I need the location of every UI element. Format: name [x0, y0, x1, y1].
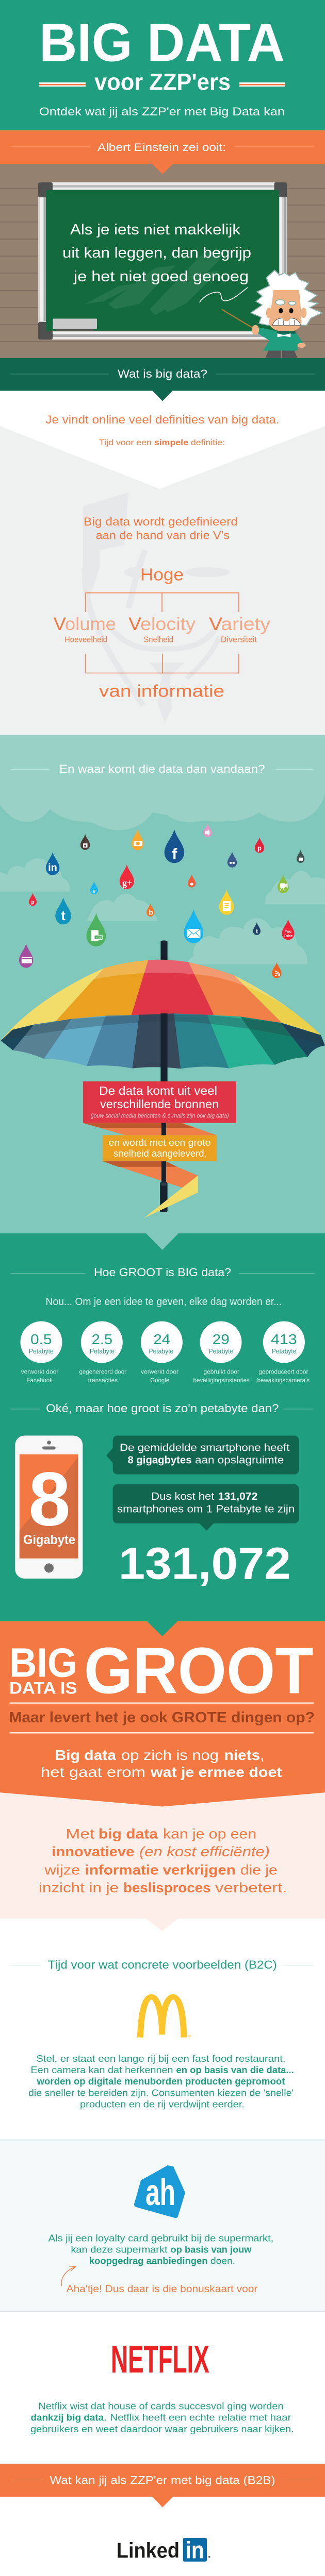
explanation: Met [66, 1826, 95, 1841]
text: die sneller te bereiden zijn. Consumenten kiezen de 'snelle' [28, 2088, 294, 2098]
red banner: (jouw social media berichten & e-mails zijn ook big data) [91, 1113, 229, 1119]
text [30, 2401, 294, 2434]
panel: big data is groot [0, 1621, 325, 1919]
panel: wat is big data [0, 358, 325, 735]
explanation: kan je op een [163, 1826, 256, 1841]
Variety: Diversiteit [221, 636, 257, 644]
band: section heading [0, 358, 325, 401]
ribbon and banners [83, 1081, 236, 1218]
eraser [53, 318, 97, 331]
text: worden op digitale menuborden producten gepromoot [36, 2076, 285, 2087]
text: producten en de rij verdwijnt eerder. [80, 2099, 245, 2109]
stat: 0.5 Petabyte Facebook: Facebook [26, 1377, 53, 1384]
Volume [54, 614, 116, 644]
section heading: Tijd voor wat concrete voorbeelden (B2C) [48, 1958, 277, 1971]
red banner [83, 1081, 236, 1123]
stat: 0.5 Petabyte Facebook: verwerkt door [21, 1368, 58, 1376]
explanation: (en kost efficiënte) [139, 1844, 270, 1859]
logo: LinkedIn: in [186, 2536, 204, 2563]
illustration: Einstein [222, 270, 322, 358]
drop icon letters: You [285, 930, 291, 934]
speech bubble: 131,072 smartphones: Dus kost het [151, 1491, 215, 1502]
drop icon letters: g+ [122, 878, 132, 888]
umbrella [1, 940, 325, 1083]
statement: Big data [55, 1747, 116, 1763]
arrow [61, 2266, 76, 2286]
explanation: beslisproces [123, 1880, 211, 1895]
chalkboard [38, 182, 287, 340]
speech bubble: 131,072 smartphones: 131,072 [218, 1491, 257, 1502]
heading: big data is groot: GROOT [84, 1634, 313, 1707]
intro text: Je vindt online veel definities van big data. [45, 413, 280, 426]
amber banner: snelheid aangeleverd. [113, 1148, 207, 1159]
clouds [0, 858, 325, 964]
red banner: verschillende bronnen [100, 1097, 219, 1111]
stat: 2.5 Petabyte transacties: gegenereerd door [79, 1368, 126, 1376]
text: Als jij een loyalty card gebruikt bij de supermarkt, [48, 2233, 273, 2243]
squiggle underline [199, 287, 248, 302]
drop icon letters: t [61, 908, 66, 923]
speech bubble: 8 gigabytes: aan opslagruimte [195, 1454, 284, 1466]
statement: het gaat erom [41, 1764, 145, 1780]
text: kan deze supermarkt [71, 2244, 168, 2255]
statement [41, 1747, 282, 1780]
illustration: smartphone 8 Gigabyte: Gigabyte [23, 1533, 75, 1547]
section heading: Hoe GROOT is BIG data? [94, 1266, 231, 1279]
chalk smudges [85, 249, 227, 315]
stat: 2.5 Petabyte transacties: 2.5 [92, 1331, 112, 1347]
text: Een camera kan dat herkennen [31, 2065, 173, 2075]
statement: niets [224, 1747, 260, 1763]
band: section heading: Wat is big data? [118, 367, 207, 380]
drop icon letters: f [172, 846, 177, 863]
text [48, 2233, 273, 2266]
Variety [209, 614, 271, 644]
stat: 24 Petabyte Google: verwerkt door [141, 1368, 178, 1376]
quote: uit kan leggen, dan begrijp [62, 245, 251, 261]
text: en op basis van die data... [176, 2065, 294, 2075]
statement: wat je ermee doet [150, 1764, 282, 1780]
band: Albert Einstein heading: Albert Einstein zei ooit: [98, 142, 226, 154]
explanation: informatie verkrijgen [85, 1862, 236, 1877]
quote: Als je iets niet makkelijk [70, 222, 241, 238]
text: gebruikers en weet daardoor waar gebruikers naar kijken. [30, 2424, 294, 2434]
definition heading: Big data wordt gedefinieerd [84, 515, 238, 528]
Variety: Variety [209, 614, 271, 634]
band: section heading [0, 2464, 325, 2507]
example: McDonald's [28, 1997, 294, 2109]
intro line: Ontdek wat jij als ZZP'er met Big Data kan [39, 105, 285, 118]
explanation: verbetert. [215, 1880, 287, 1895]
explanation [39, 1826, 287, 1895]
stat: 2.5 Petabyte transacties: Petabyte [90, 1347, 115, 1355]
logo: LinkedIn: Linked [117, 2538, 180, 2562]
top bracket [86, 593, 239, 612]
illustration: smartphone 8 Gigabyte: 8 [28, 1457, 71, 1541]
panel: Einstein quote with chalkboard [0, 130, 325, 358]
drop icon letters [31, 844, 293, 938]
section heading: En waar komt die data dan vandaan? [59, 762, 265, 775]
text: Netflix wist dat house of cards succesvol ging worden [38, 2401, 284, 2411]
statement: , [260, 1747, 264, 1763]
stat: 29 Petabyte beveiligingsinstanties: Petabyte [209, 1347, 233, 1355]
panel: B2B voorbeelden [0, 2464, 325, 2576]
text: Stel, er staat een lange rij bij een fast food restaurant. [36, 2054, 286, 2064]
statement: op zich is nog [121, 1747, 219, 1763]
logo: McDonald's arches [140, 1997, 191, 2038]
drop icon letters: v [93, 888, 96, 894]
drop icon letters: in [48, 862, 57, 874]
stat: 29 Petabyte beveiligingsinstanties: beveiligingsinstanties [193, 1377, 250, 1384]
speech bubble: 131,072 smartphones [113, 1484, 299, 1531]
text [28, 2054, 294, 2109]
band: Albert Einstein heading [0, 130, 325, 174]
stat: 29 Petabyte beveiligingsinstanties: gebruikt door [203, 1368, 239, 1376]
stat: 29 Petabyte beveiligingsinstanties: 29 [213, 1331, 230, 1347]
intro text [45, 413, 280, 447]
speech bubble: 8 gigabytes: 8 gigagbytes [128, 1454, 192, 1466]
heading: big data is groot: BIG [9, 1639, 77, 1685]
explanation: wijze [44, 1862, 80, 1877]
panel: B2C voorbeelden [0, 1919, 325, 2464]
stat: 413 Petabyte bewakingscamera's [257, 1321, 310, 1384]
stat: 29 Petabyte beveiligingsinstanties [193, 1321, 250, 1384]
Volume: Volume [54, 614, 116, 634]
subtitle: voor ZZP'ers [94, 69, 231, 95]
drop icon letters: Tube [284, 934, 293, 938]
speech bubble: 8 gigabytes [106, 1435, 299, 1475]
stat: 2.5 Petabyte transacties [79, 1321, 126, 1384]
cloud banner [0, 735, 325, 831]
stat: 24 Petabyte Google: 24 [153, 1331, 170, 1347]
intro sentence: Nou... Om je een idee te geven, elke dag worden er... [45, 1296, 282, 1308]
logo: AH: ah [145, 2172, 175, 2213]
example: Netflix [30, 2337, 294, 2434]
logo: AH [134, 2165, 185, 2218]
stat: 2.5 Petabyte transacties: transacties [88, 1377, 118, 1384]
Velocity: Velocity [128, 614, 196, 634]
band: section heading: Wat kan jij als ZZP'er met big data (B2B) [50, 2473, 275, 2486]
text: dankzij big data [31, 2412, 104, 2422]
stat: 413 Petabyte bewakingscamera's: bewakingscamera's [257, 1377, 310, 1384]
amber banner: en wordt met een grote [108, 1138, 210, 1148]
section heading: petabyte: Oké, maar hoe groot is zo'n petabyte dan? [46, 1402, 279, 1415]
illustration: smartphone 8 Gigabyte [15, 1435, 83, 1579]
stat: 413 Petabyte bewakingscamera's: Petabyte [272, 1347, 296, 1355]
small log label: LOG [96, 937, 103, 940]
stat: 24 Petabyte Google: Google [150, 1377, 170, 1384]
amber banner [103, 1135, 217, 1161]
example: LinkedIn [26, 2536, 297, 2576]
big number: 131,072 [119, 1538, 291, 1588]
bottom bracket [86, 654, 239, 673]
label: Hoge: Hoge [140, 565, 184, 584]
stat: 413 Petabyte bewakingscamera's: 413 [271, 1331, 297, 1347]
quote: je het niet goed genoeg [73, 268, 249, 285]
drop icon letters: t [256, 927, 258, 935]
diagram: three Vs [54, 565, 271, 700]
question between rules: Maar levert het je ook GROTE dingen op? [9, 1709, 315, 1726]
panel: data sources with umbrella [0, 735, 325, 1234]
logo: Netflix: NETFLIX [111, 2337, 209, 2381]
quote [62, 222, 251, 285]
text: koopgedrag aanbiedingen [89, 2256, 208, 2266]
Velocity: Snelheid [143, 636, 173, 644]
definition heading: aan de hand van drie V's [96, 529, 230, 542]
stat: 413 Petabyte bewakingscamera's: geproduceert door [258, 1368, 308, 1376]
red banner: De data komt uit veel [99, 1084, 217, 1097]
label: van informatie: van informatie [99, 681, 224, 700]
stat: 0.5 Petabyte Facebook: 0.5 [30, 1331, 52, 1347]
text: . Netflix heeft een echte relatie met haar [104, 2412, 291, 2422]
heading: big data is groot: DATA IS [9, 1679, 77, 1697]
text: op basis van jouw [171, 2244, 252, 2255]
Velocity [128, 614, 196, 644]
drop icon letters: p [257, 844, 262, 852]
logo: LinkedIn [117, 2536, 210, 2563]
explanation: die je [240, 1862, 278, 1877]
panel: hoe groot is big data [0, 1233, 325, 1621]
speech bubble: 8 gigabytes: De gemiddelde smartphone heeft [120, 1443, 290, 1454]
stat: 24 Petabyte Google: Petabyte [149, 1347, 173, 1355]
explanation: big data [99, 1826, 158, 1841]
stat: 24 Petabyte Google [141, 1321, 183, 1384]
title: BIG DATA [39, 12, 285, 73]
stat: 0.5 Petabyte Facebook: Petabyte [29, 1347, 54, 1355]
illustration: faint mask [83, 493, 230, 723]
example: Albert Heijn [0, 2139, 325, 2312]
explanation: innovatieve [52, 1844, 134, 1859]
Volume: Hoeveelheid [64, 636, 107, 644]
text: doen. [210, 2256, 235, 2266]
data drops [19, 824, 304, 978]
handwritten note: Aha'tje! Dus daar is die bonuskaart voor [67, 2284, 258, 2295]
panel: header [0, 0, 325, 130]
definition heading [84, 515, 238, 542]
subtitle rules [39, 82, 285, 87]
drop icon letters: b [149, 908, 153, 917]
stat: 0.5 Petabyte Facebook [21, 1321, 62, 1384]
explanation: inzicht in je [39, 1880, 119, 1895]
drop icons [22, 830, 303, 976]
intro text: Tijd voor een simpele definitie: [99, 438, 225, 447]
speech bubble: 131,072 smartphones: smartphones om 1 Petabyte te zijn [117, 1504, 295, 1515]
drop icon letters: p [31, 900, 35, 905]
